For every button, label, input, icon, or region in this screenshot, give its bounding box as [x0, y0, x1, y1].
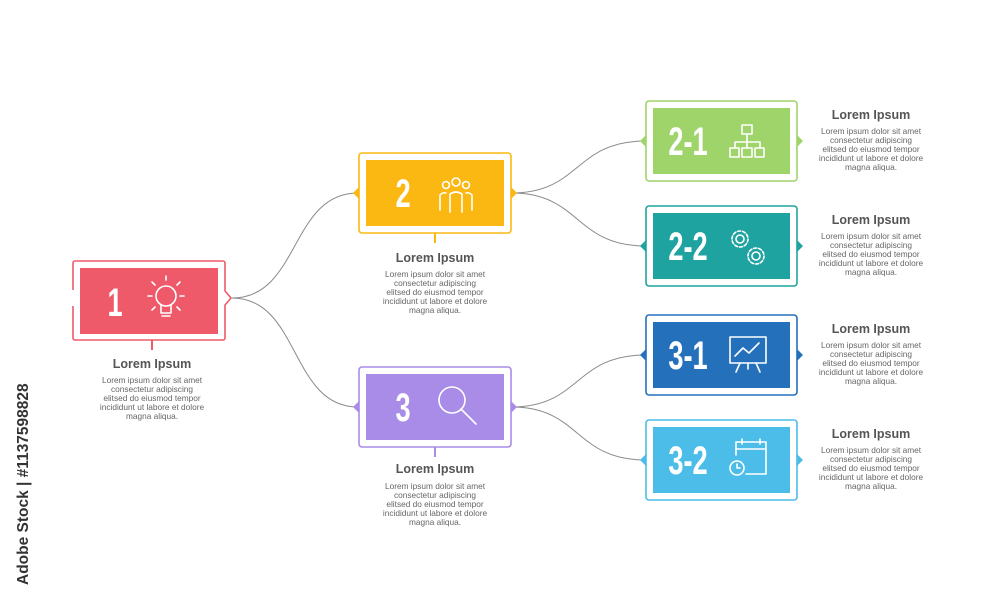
text 3: Lorem Ipsum	[396, 462, 474, 476]
text 2-2: incididunt ut labore et dolore	[819, 258, 924, 268]
text 2-2: magna aliqua.	[845, 267, 897, 277]
box 1: 1	[107, 281, 123, 325]
connector lines	[232, 141, 645, 460]
text 3-1: incididunt ut labore et dolore	[819, 367, 924, 377]
text 3-1	[819, 322, 924, 386]
text 3	[383, 462, 488, 527]
icon: light bulb	[148, 276, 184, 316]
text 3-2: Lorem Ipsum	[832, 427, 910, 441]
text 3-1: consectetur adipiscing	[830, 349, 912, 359]
text 3-2: consectetur adipiscing	[830, 454, 912, 464]
text 3-2: elitsed do eiusmod tempor	[822, 463, 920, 473]
text 2-1: magna aliqua.	[845, 162, 897, 172]
text 2-2: Lorem ipsum dolor sit amet	[821, 231, 922, 241]
box 3	[353, 367, 517, 457]
text 1: elitsed do eiusmod tempor	[103, 393, 201, 403]
text 2-1: incididunt ut labore et dolore	[819, 153, 924, 163]
box 1	[73, 261, 231, 350]
text 2-2: Lorem Ipsum	[832, 213, 910, 227]
box 2: 2	[395, 172, 411, 216]
box 2-2: 2-2	[668, 225, 708, 269]
text 2: Lorem Ipsum	[396, 251, 474, 265]
icon: hierarchy	[730, 125, 764, 157]
box 2	[353, 153, 517, 243]
text 2: Lorem ipsum dolor sit amet	[385, 269, 486, 279]
icon: presentation	[730, 337, 766, 372]
text 2: consectetur adipiscing	[394, 278, 476, 288]
text 2: magna aliqua.	[409, 305, 461, 315]
text 3: Lorem ipsum dolor sit amet	[385, 481, 486, 491]
box 2-1: 2-1	[668, 120, 708, 164]
text 3-2: Lorem ipsum dolor sit amet	[821, 445, 922, 455]
text 3: consectetur adipiscing	[394, 490, 476, 500]
box 3-2: 3-2	[668, 439, 708, 483]
text 3-2: incididunt ut labore et dolore	[819, 472, 924, 482]
text 2	[383, 251, 488, 315]
text 2: incididunt ut labore et dolore	[383, 296, 488, 306]
text 2-2: consectetur adipiscing	[830, 240, 912, 250]
text 3: elitsed do eiusmod tempor	[386, 499, 484, 509]
icon: calendar clock	[730, 439, 766, 475]
text 3: magna aliqua.	[409, 517, 461, 527]
text 3-1: elitsed do eiusmod tempor	[822, 358, 920, 368]
text 2-1: elitsed do eiusmod tempor	[822, 144, 920, 154]
icon: magnifier	[439, 387, 476, 424]
box 3: 3	[395, 386, 411, 430]
text 2-2: elitsed do eiusmod tempor	[822, 249, 920, 259]
text 2-1: Lorem ipsum dolor sit amet	[821, 126, 922, 136]
text 1	[100, 357, 205, 421]
text 2-1: Lorem Ipsum	[832, 108, 910, 122]
text 2-1	[819, 108, 924, 172]
text 3-2	[819, 427, 924, 491]
text 3-1: Lorem Ipsum	[832, 322, 910, 336]
icon: team	[440, 178, 472, 212]
box 2-2	[640, 206, 803, 286]
text 3-1: magna aliqua.	[845, 376, 897, 386]
text 3-1: Lorem ipsum dolor sit amet	[821, 340, 922, 350]
text 1: Lorem ipsum dolor sit amet	[102, 375, 203, 385]
box 3-1	[640, 315, 803, 395]
text 2-1: consectetur adipiscing	[830, 135, 912, 145]
text 1: consectetur adipiscing	[111, 384, 193, 394]
text 3-2: magna aliqua.	[845, 481, 897, 491]
icon: gears	[732, 231, 764, 264]
text 1: incididunt ut labore et dolore	[100, 402, 205, 412]
box 2-1	[640, 101, 803, 181]
box 3-1: 3-1	[668, 334, 708, 378]
text 1: Lorem Ipsum	[113, 357, 191, 371]
vertical stock label: Adobe Stock | #1137598828	[15, 383, 32, 585]
box 3-2	[640, 420, 803, 500]
text 3: incididunt ut labore et dolore	[383, 508, 488, 518]
text 1: magna aliqua.	[126, 411, 178, 421]
text 2-2	[819, 213, 924, 277]
text 2: elitsed do eiusmod tempor	[386, 287, 484, 297]
